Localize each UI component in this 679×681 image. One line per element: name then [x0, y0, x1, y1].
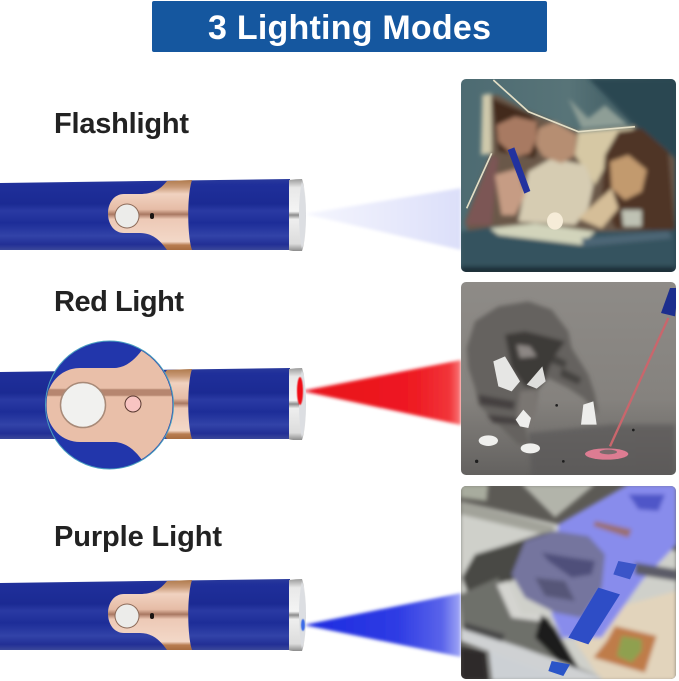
- photo: family reading under a blanket with flashlight: [460, 78, 677, 275]
- mother's face: [497, 117, 537, 157]
- pen: red light mode with magnified button: [0, 341, 306, 469]
- magnifier circle: [45, 341, 180, 469]
- ground shadow: [528, 425, 675, 478]
- photo: cat chasing red laser dot: [460, 281, 678, 478]
- boy's face: [536, 122, 577, 163]
- photo: banknote under purple light: [460, 484, 677, 681]
- blanket edge: [467, 80, 635, 208]
- portrait face: [512, 531, 605, 618]
- open book: [490, 223, 595, 245]
- note bottom edge: [460, 628, 602, 681]
- portrait collar: [497, 581, 548, 621]
- miniature pen in frame: [661, 288, 676, 316]
- inside warm area: [465, 95, 675, 235]
- purple light beam: [304, 593, 461, 657]
- purple emitter glow: [301, 619, 305, 631]
- pen: flashlight mode: [0, 179, 306, 251]
- title banner: 3 Lighting Modes: [208, 9, 491, 47]
- girl's hair: [602, 128, 675, 232]
- white chest: [493, 356, 520, 391]
- girl's face: [610, 155, 647, 200]
- cat paws: [479, 401, 597, 453]
- serial text blocks on note: [635, 563, 677, 581]
- laser dot on ground: [585, 448, 628, 460]
- red laser beam: [302, 360, 461, 425]
- portrait coat: [535, 614, 602, 678]
- warm right side of note: [575, 591, 677, 681]
- title banner: [152, 1, 547, 52]
- white flashlight beam: [305, 188, 461, 250]
- purple light wash: [552, 484, 677, 638]
- heading: Purple Light: Purple Light: [54, 521, 222, 553]
- mother's hair: [492, 98, 542, 158]
- heading: Red Light: Red Light: [54, 286, 184, 318]
- magnified button: [60, 382, 106, 428]
- security strip: [568, 588, 620, 644]
- cat head: [505, 331, 565, 388]
- miniature flashlight: [508, 147, 530, 194]
- pebbles: [555, 404, 558, 407]
- boy's shirt: [518, 158, 593, 225]
- background notes: [460, 484, 488, 501]
- red emitter glow: [297, 377, 303, 405]
- laser beam line: [610, 318, 668, 446]
- glowing light on book: [547, 212, 563, 230]
- copper inkwell: [593, 626, 657, 673]
- cat body: [467, 301, 598, 445]
- bed: [461, 226, 676, 268]
- hand: [495, 168, 525, 215]
- pen: purple light mode: [0, 579, 306, 651]
- main banknote light: [460, 501, 677, 681]
- heading: Flashlight: Flashlight: [54, 108, 189, 140]
- portrait hair: [462, 531, 555, 594]
- magnified indicator light: [125, 396, 141, 412]
